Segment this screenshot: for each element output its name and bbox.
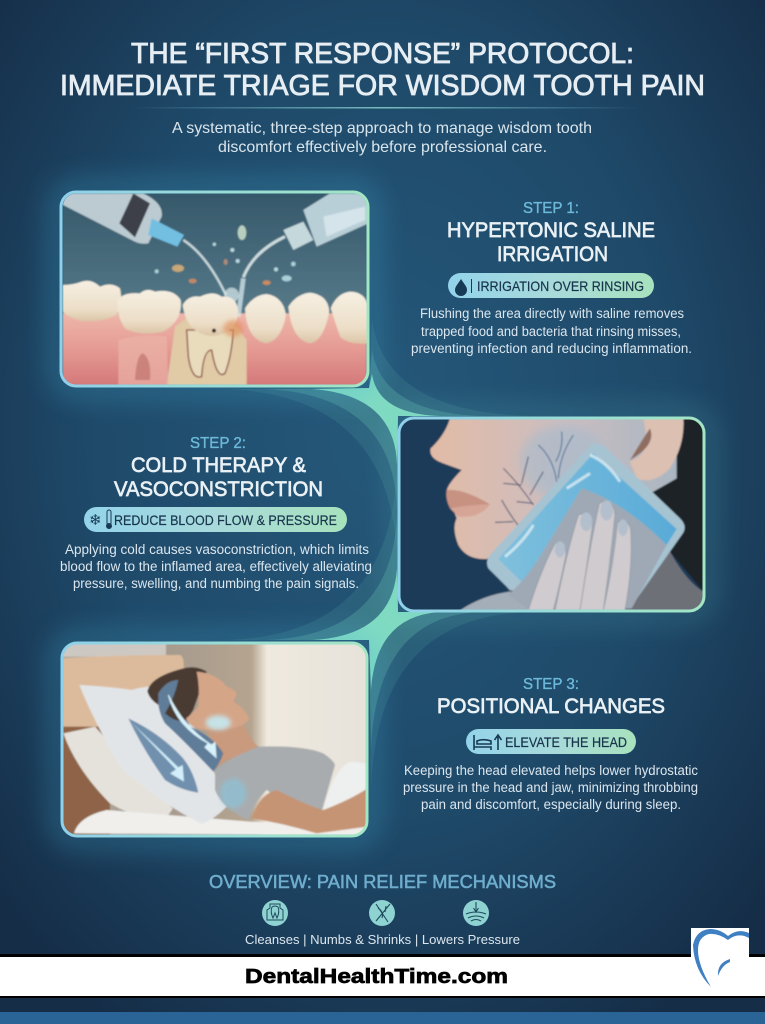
lips xyxy=(446,490,490,508)
back pillow xyxy=(63,727,173,822)
pill: reduce blood flow xyxy=(84,507,347,532)
body: step 3: pain and discomfort, especially during sleep. xyxy=(421,797,681,812)
icon: saline bottle xyxy=(238,193,368,317)
main pillow xyxy=(79,685,227,824)
teeth row xyxy=(63,281,368,385)
bed sheet xyxy=(74,810,367,835)
bottom stripe xyxy=(0,1012,765,1024)
heading: step 1: IRRIGATION xyxy=(497,243,608,266)
icon: numbs and shrinks xyxy=(369,900,395,926)
white pillow behind neck xyxy=(237,730,256,751)
heading: step 2: VASOCONSTRICTION xyxy=(114,478,323,501)
hair xyxy=(147,667,207,721)
body: step 1: trapped food and bacteria that rinsing misses, xyxy=(421,324,681,339)
connector: step 1 to step 2 xyxy=(225,320,530,560)
ice pack xyxy=(487,444,685,608)
subtitle xyxy=(172,120,592,156)
body: step 2 xyxy=(60,542,372,591)
footer band xyxy=(0,954,765,998)
blanket right xyxy=(323,762,367,810)
title: IMMEDIATE TRIAGE FOR WISDOM TOOTH PAIN xyxy=(60,70,705,102)
icon: syringe xyxy=(57,193,226,295)
head band xyxy=(158,680,223,772)
body: step 1 xyxy=(411,306,692,356)
panel: step 1 image, saline irrigation xyxy=(57,189,371,389)
body: step 3: Keeping the head elevated helps lower hydrostatic xyxy=(404,763,698,778)
heading: step 1 xyxy=(447,219,655,266)
title xyxy=(60,38,705,102)
panel: step 2 image, cold compress xyxy=(397,415,708,614)
neck xyxy=(206,724,258,766)
heading: step 3: POSITIONAL CHANGES xyxy=(437,695,665,718)
text block: step 1: STEP 1: xyxy=(523,200,579,217)
heading: step 2: COLD THERAPY & xyxy=(131,454,306,477)
text block: step 2 xyxy=(60,435,372,591)
cloth xyxy=(508,488,667,610)
face xyxy=(186,672,249,730)
body xyxy=(215,746,335,820)
subtitle: A systematic, three-step approach to manage wisdom tooth xyxy=(172,120,592,137)
body: step 2: Applying cold causes vasoconstriction, which limits xyxy=(65,542,369,557)
headboard xyxy=(64,654,184,728)
overview captions: Cleanses | Numbs & Shrinks | Lowers Pressure xyxy=(245,932,520,947)
body: step 1: Flushing the area directly with saline removes xyxy=(420,306,684,321)
heading: step 2 xyxy=(114,454,323,501)
pill: elevate the head: ELEVATE THE HEAD xyxy=(505,734,627,750)
body: step 2: pressure, swelling, and numbing the pain signals. xyxy=(73,576,359,591)
face xyxy=(430,418,677,559)
panel: step 3 image, elevated sleeping xyxy=(58,640,371,839)
subtitle: discomfort effectively before professional care. xyxy=(218,139,547,156)
text block: step 3: STEP 3: xyxy=(523,676,579,693)
icon: lowers pressure xyxy=(463,900,489,926)
text block: step 2: STEP 2: xyxy=(190,435,246,452)
hand xyxy=(528,502,631,610)
ear xyxy=(630,418,683,480)
icon: cleanses xyxy=(262,900,288,926)
text block: step 3 xyxy=(403,676,698,812)
neck arrow xyxy=(168,695,216,757)
pill: reduce blood flow: ❄ xyxy=(89,512,102,529)
title: THE “FIRST RESPONSE” PROTOCOL: xyxy=(131,38,634,70)
body: step 3 xyxy=(403,763,698,812)
pill: irrigation over rinsing: IRRIGATION OVER RINSING xyxy=(477,278,644,294)
veins xyxy=(495,432,573,526)
body: step 1: preventing infection and reducing inflammation. xyxy=(411,341,692,356)
body: step 3: pressure in the head and jaw, minimizing throbbing xyxy=(403,780,698,795)
overview heading: OVERVIEW: PAIN RELIEF MECHANISMS xyxy=(209,872,556,892)
pill: reduce blood flow: REDUCE BLOOD FLOW & PRESSURE xyxy=(114,512,337,528)
pill: irrigation over rinsing xyxy=(448,273,654,298)
pill: elevate the head xyxy=(466,729,636,754)
neck xyxy=(507,552,702,610)
body: step 2: blood flow to the inflamed area, effectively alleviating xyxy=(60,559,372,574)
footer band: DentalHealthTime.com xyxy=(245,966,508,988)
logo: tooth xyxy=(691,928,749,987)
pillow arrow band xyxy=(128,718,198,793)
text block: step 1 xyxy=(411,200,692,356)
particles xyxy=(155,225,296,302)
connector: step 2 to step 3 xyxy=(225,465,530,790)
arm xyxy=(252,788,367,833)
hair xyxy=(653,420,702,591)
heading: step 1: HYPERTONIC SALINE xyxy=(447,219,655,242)
